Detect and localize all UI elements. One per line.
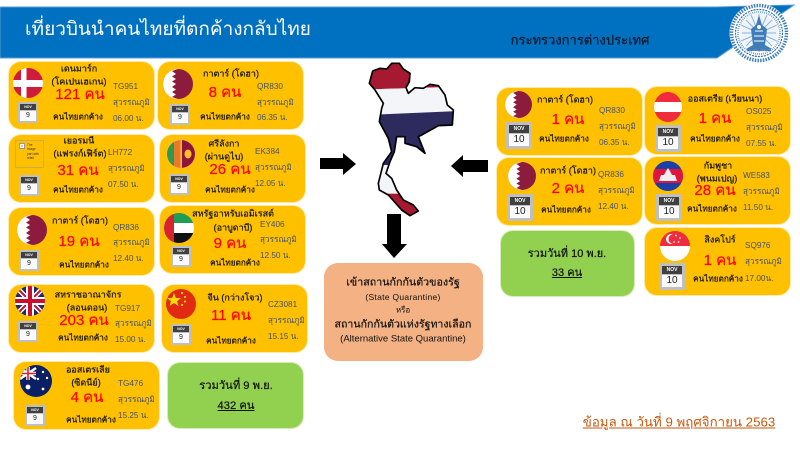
flight details: QR830	[599, 106, 625, 115]
flight details: WE583	[743, 171, 770, 180]
count: 4 คน	[71, 389, 103, 406]
panel: Denmark flight	[9, 62, 154, 129]
calendar icon: NOV	[176, 107, 184, 111]
panel: Sri Lanka flight: 12.05 น.	[255, 179, 286, 188]
panel: Germany flight: 07.50 น.	[108, 180, 139, 189]
destination: กาตาร์ (โดฮา)	[540, 166, 596, 176]
panel: China flight: สุวรรณภูมิ	[268, 316, 305, 325]
panel: Australia flight	[14, 362, 159, 429]
panel: China flight: คนไทยตกค้าง	[206, 336, 256, 346]
panel: Germany flight: คนไทยตกค้าง	[53, 186, 103, 194]
panel: United Kingdom flight: คนไทยตกค้าง	[58, 334, 108, 342]
total date: รวมวันที่ 9 พ.ย.	[199, 380, 273, 392]
broken image placeholder: The image part with relati	[27, 143, 39, 160]
panel: Qatar QR830 10 Nov: คนไทยตกค้าง	[539, 134, 589, 144]
panel: quarantine: (State Quarantine)	[365, 292, 441, 302]
panel: Germany flight	[9, 135, 154, 202]
calendar icon: NOV	[25, 253, 33, 257]
destination: สิงคโปร์	[704, 234, 736, 244]
destination: กาตาร์ (โดฮา)	[537, 94, 593, 104]
count: 11 คน	[211, 307, 251, 324]
panel: quarantine	[324, 263, 483, 361]
panel: Sri Lanka flight: สุวรรณภูมิ	[255, 163, 292, 172]
total date: รวมวันที่ 10 พ.ย.	[528, 248, 606, 260]
panel: Cambodia flight: คนไทยตกค้าง	[687, 204, 737, 214]
flag: Sri Lanka	[166, 139, 196, 169]
flight details: QR830	[257, 82, 283, 91]
flag: Qatar	[505, 91, 532, 118]
panel: Australia flight: สุวรรณภูมิ	[118, 395, 155, 404]
calendar icon: 9	[179, 256, 183, 263]
flag: China	[166, 289, 196, 319]
destination: กาตาร์ (โดฮา)	[52, 216, 108, 226]
panel: Denmark flight: สุวรรณภูมิ	[113, 98, 150, 107]
header banner	[0, 4, 796, 58]
flight details: QR836	[113, 223, 139, 232]
calendar icon: NOV	[177, 327, 185, 331]
flag: UAE	[164, 213, 194, 243]
destination: สหรัฐอาหรับเอมิเรสต์	[192, 208, 274, 218]
calendar icon	[18, 321, 38, 342]
panel: Qatar QR830 flight: 06.35 น.	[257, 113, 288, 122]
panel: Austria flight	[645, 87, 790, 154]
panel: total 10 November	[501, 231, 634, 296]
or: หรือ	[396, 306, 410, 314]
panel: Singapore flight: 17.00น.	[745, 274, 773, 283]
calendar icon: 9	[177, 184, 181, 191]
panel: UAE flight: (อาบูดาบี)	[214, 222, 252, 232]
panel: Qatar QR836 10 Nov: คนไทยตกค้าง	[541, 206, 591, 214]
flag: Austria	[654, 92, 682, 122]
destination: ศรีลังกา	[209, 138, 239, 148]
count: 19 คน	[58, 233, 100, 250]
flight details: EY406	[260, 220, 285, 229]
count: 1 คน	[699, 110, 731, 127]
broken image placeholder: ×	[21, 143, 23, 148]
calendar icon: 9	[179, 334, 183, 341]
calendar icon: NOV	[514, 126, 524, 132]
count: 26 คน	[209, 161, 251, 178]
panel: Cambodia flight: สุวรรณภูมิ	[743, 187, 780, 196]
calendar icon: NOV	[177, 249, 185, 253]
icon: ministry seal	[730, 4, 788, 62]
panel: Qatar QR830 10 Nov: 06.35 น.	[599, 138, 630, 147]
panel: Austria flight: สุวรรณภูมิ	[746, 123, 783, 132]
calendar icon: 10	[662, 137, 674, 148]
panel: Australia flight: 15.25 น.	[118, 411, 149, 420]
flight details: CZ3081	[268, 300, 297, 309]
alternative state quarantine: สถานกักกันตัวแห่งรัฐทางเลือก	[335, 318, 471, 330]
flag: Qatar	[508, 162, 536, 190]
calendar icon: 10	[666, 275, 678, 286]
arrow: right	[320, 153, 356, 175]
calendar icon: 10	[514, 206, 526, 217]
panel: Qatar QR836 flight: คนไทยตกค้าง	[59, 260, 109, 270]
panel: Cambodia flight	[645, 157, 790, 224]
count: 28 คน	[694, 182, 736, 199]
panel: UAE flight: สุวรรณภูมิ	[260, 235, 297, 244]
panel: Singapore flight	[645, 228, 790, 295]
panel: Qatar QR830 10 Nov: สุวรรณภูมิ	[599, 122, 636, 131]
panel: United Kingdom flight	[9, 285, 154, 352]
destination: ออสเตรีย (เวียนนา)	[688, 94, 762, 104]
panel: Australia flight: (ซิดนีย์)	[71, 378, 101, 388]
panel: United Kingdom flight: (ลอนดอน)	[67, 302, 107, 312]
panel: Sri Lanka flight: คนไทยตกค้าง	[205, 186, 255, 194]
calendar icon	[19, 250, 39, 271]
panel: Singapore flight: คนไทยตกค้าง	[693, 274, 743, 284]
arrow: left	[451, 155, 488, 177]
panel: Sri Lanka flight	[160, 135, 305, 202]
calendar icon: NOV	[24, 105, 32, 109]
panel: China flight	[162, 285, 307, 352]
flight details: EK384	[255, 147, 280, 156]
flight details: SQ976	[745, 241, 770, 250]
total count: 33 คน	[552, 267, 582, 279]
calendar icon: 9	[26, 331, 30, 338]
calendar icon	[19, 175, 39, 196]
calendar icon	[169, 174, 189, 195]
panel: Qatar QR836 10 Nov	[497, 158, 642, 225]
flight details: TG476	[118, 379, 143, 388]
calendar icon	[171, 246, 191, 267]
calendar icon: NOV	[667, 267, 677, 273]
panel: United Kingdom flight: สุวรรณภูมิ	[115, 319, 152, 328]
panel: total 9 November	[168, 363, 303, 428]
calendar icon	[659, 263, 685, 290]
flight details: TG951	[113, 82, 138, 91]
calendar icon	[656, 194, 682, 221]
calendar icon: NOV	[515, 198, 525, 204]
title: เที่ยวบินนำคนไทยที่ตกค้างกลับไทย	[25, 19, 311, 40]
calendar icon: 9	[178, 114, 182, 121]
panel: Denmark flight: (โคเปนเฮเกน)	[51, 76, 107, 86]
calendar icon	[506, 122, 532, 149]
panel: Qatar QR830 flight: คนไทยตกค้าง	[200, 112, 250, 122]
panel: Singapore flight: สุวรรณภูมิ	[745, 257, 782, 266]
calendar icon: NOV	[31, 408, 39, 412]
panel: Australia flight: คนไทยตกค้าง	[66, 416, 116, 424]
panel: Qatar QR836 flight: สุวรรณภูมิ	[113, 238, 150, 247]
destination: กัมพูชา	[704, 160, 732, 170]
panel: Qatar QR830 flight	[158, 62, 303, 129]
flag: Denmark	[13, 68, 43, 98]
flag: Cambodia	[653, 161, 683, 191]
calendar icon: 10	[513, 134, 525, 145]
flight details: LH772	[108, 148, 132, 157]
calendar icon: 9	[27, 260, 31, 267]
panel: Denmark flight: คนไทยตกค้าง	[53, 112, 103, 122]
count: 2 คน	[552, 180, 584, 197]
destination: เดนมาร์ก	[61, 64, 97, 74]
panel: Qatar QR830 10 Nov	[497, 88, 642, 155]
count: 9 คน	[214, 235, 246, 252]
data date note: ข้อมูล ณ วันที่ 9 พฤศจิกายน 2563	[583, 414, 775, 430]
calendar icon: 9	[33, 415, 37, 422]
panel: Cambodia flight: 11.50 น.	[743, 203, 773, 212]
panel: Qatar QR830 flight: สุวรรณภูมิ	[257, 98, 294, 107]
panel: Denmark flight: 06.00 น.	[113, 114, 144, 123]
flag: Qatar	[17, 215, 47, 245]
icon: Thailand flag map	[368, 62, 454, 216]
calendar icon: NOV	[664, 198, 674, 204]
arrow: down	[382, 214, 407, 258]
flag: Australia	[20, 365, 52, 397]
calendar icon	[655, 125, 681, 152]
flag: Singapore	[660, 231, 690, 261]
ministry name: กระทรวงการต่างประเทศ	[511, 32, 649, 48]
panel: Qatar QR836 10 Nov: 12.40 น.	[598, 202, 629, 211]
state quarantine: เข้าสถานกักกันตัวของรัฐ	[346, 276, 460, 288]
flight details: OS025	[746, 107, 772, 116]
count: 1 คน	[552, 111, 584, 128]
panel: Sri Lanka flight: (ผ่านดูไบ)	[205, 152, 243, 162]
panel: Austria flight: คนไทยตกค้าง	[690, 134, 740, 144]
destination: เยอรมนี	[64, 136, 94, 146]
calendar icon: NOV	[175, 177, 183, 181]
flag: Qatar	[163, 69, 193, 99]
calendar icon: NOV	[25, 178, 33, 182]
count: 31 คน	[57, 162, 99, 179]
panel: quarantine: (Alternative State Quarantine)	[340, 334, 466, 344]
panel: Cambodia flight: (พนมเปญ)	[697, 174, 737, 184]
panel: Qatar QR836 10 Nov: สุวรรณภูมิ	[598, 186, 635, 195]
calendar icon: 9	[26, 112, 30, 119]
flight details: QR836	[598, 170, 624, 179]
panel: UAE flight: 12.50 น.	[260, 251, 291, 260]
calendar icon	[507, 194, 533, 221]
calendar icon: 9	[27, 185, 31, 192]
count: 8 คน	[209, 84, 241, 101]
count: 121 คน	[55, 86, 105, 103]
flight details: TG917	[115, 304, 140, 313]
panel: United Kingdom flight: 15.00 น.	[115, 335, 146, 344]
calendar icon	[25, 405, 45, 426]
panel: Germany flight: (แฟรงก์เฟิร์ต)	[54, 148, 106, 158]
panel: Qatar QR836 flight	[9, 208, 154, 275]
calendar icon: NOV	[663, 129, 673, 135]
calendar icon	[171, 324, 191, 345]
panel: Germany flight: สุวรรณภูมิ	[108, 164, 145, 173]
destination: จีน (กว่างโจว)	[207, 292, 263, 302]
calendar icon: 10	[663, 206, 675, 217]
calendar icon	[18, 102, 38, 123]
destination: กาตาร์ (โดฮา)	[203, 68, 259, 78]
panel: UAE flight	[160, 206, 305, 273]
destination: ออสเตรเลีย	[66, 364, 110, 374]
total count: 432 คน	[218, 400, 254, 412]
count: 1 คน	[704, 252, 736, 269]
destination: สหราชอาณาจักร	[55, 290, 121, 300]
calendar icon	[170, 104, 190, 125]
calendar icon: NOV	[24, 324, 32, 328]
broken image placeholder	[15, 140, 44, 168]
panel: China flight: 15.15 น.	[268, 332, 299, 341]
panel: Qatar QR836 flight: 12.40 น.	[113, 254, 144, 263]
panel: Austria flight: 07.55 น.	[746, 139, 777, 148]
flag: United Kingdom	[15, 286, 45, 316]
panel: UAE flight: คนไทยตกค้าง	[210, 258, 260, 268]
count: 203 คน	[59, 312, 109, 329]
